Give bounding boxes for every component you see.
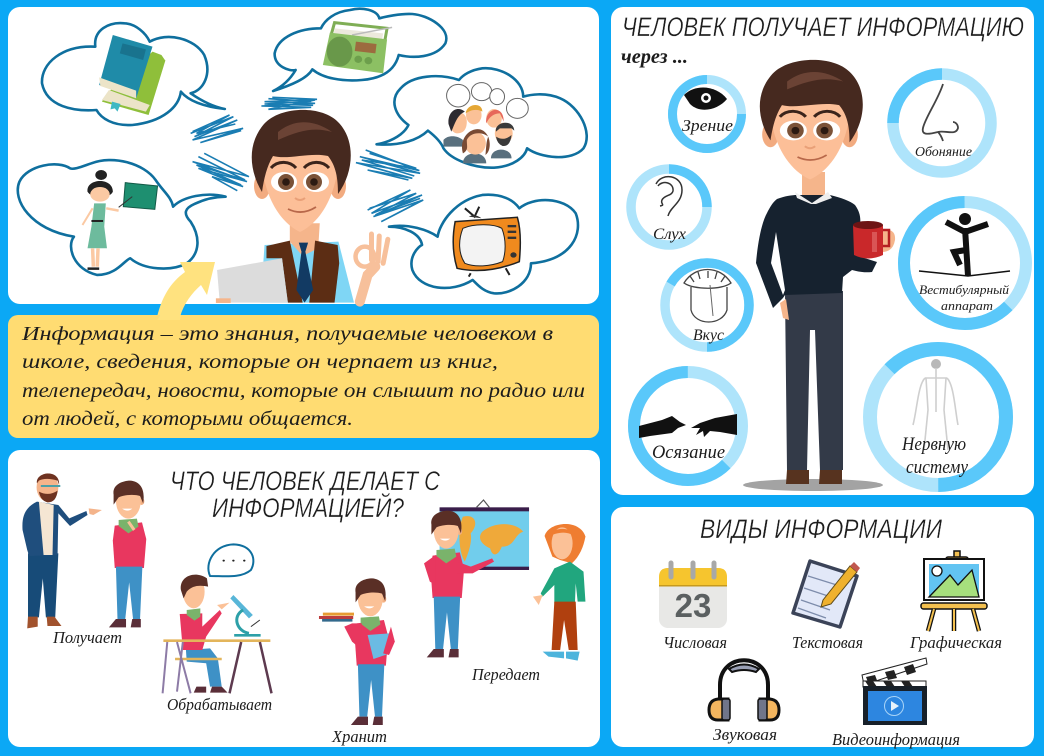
label: Текстовая	[792, 633, 863, 652]
ring: touch: Осязание	[652, 442, 725, 463]
scene: passes on	[424, 500, 585, 661]
scene: processes	[163, 544, 272, 693]
icon: easel with picture	[921, 551, 987, 631]
ring: vision	[672, 80, 742, 148]
icon: calendar	[659, 563, 727, 628]
ring: smell: Обоняние	[915, 145, 972, 160]
ring: taste: Вкус	[693, 327, 724, 344]
definition text: телепередач, новости, которые он слышит по радио или	[22, 380, 585, 402]
icon: red mug	[853, 221, 895, 258]
panel: types of information	[611, 507, 1034, 749]
icon: headphones	[709, 660, 779, 720]
icon: books	[99, 35, 165, 115]
definition text: школе, сведения, которые он черпает из книг,	[22, 351, 498, 373]
character: man with paper and OK gesture	[216, 110, 388, 303]
icon: group of people talking	[443, 83, 528, 163]
ring: nervous system: Нервную	[901, 434, 966, 455]
ring: vestibular apparatus: Вестибулярный	[919, 282, 1010, 297]
label: Графическая	[909, 633, 1002, 652]
ring: nervous system	[870, 349, 1006, 485]
definition text: Информация – это знания, получаемые человеком в	[21, 323, 553, 345]
icon: television	[453, 207, 520, 277]
label: Обрабатывает	[167, 695, 272, 714]
panel: definition of information	[8, 315, 599, 438]
label: Числовая	[663, 633, 727, 652]
heading: ВИДЫ ИНФОРМАЦИИ	[700, 514, 943, 544]
icon: teacher at blackboard	[82, 170, 158, 269]
heading: ЧТО ЧЕЛОВЕК ДЕЛАЕТ С	[170, 466, 440, 496]
speech bubbles and scribbles	[18, 9, 587, 293]
heading: ИНФОРМАЦИЕЙ?	[212, 491, 404, 523]
panel: where information comes from	[8, 7, 599, 317]
heading	[170, 466, 440, 523]
label: Хранит	[331, 727, 387, 746]
definition text: от людей, с которыми общается.	[22, 408, 353, 430]
label: Получает	[52, 628, 122, 647]
ring: vision: Зрение	[682, 116, 733, 135]
label: Звуковая	[713, 725, 777, 744]
scene: stores	[319, 578, 395, 725]
icon: notepad	[793, 561, 860, 627]
ring: nervous system: систему	[906, 457, 969, 478]
ring: taste	[665, 263, 749, 347]
character: man with mug	[743, 60, 883, 491]
subheading: через ...	[621, 46, 688, 68]
icon: radio	[323, 23, 392, 73]
label: Видеоинформация	[832, 730, 960, 749]
ring: vestibular apparatus	[904, 202, 1026, 324]
arrow	[157, 262, 215, 317]
ring: hearing	[631, 169, 707, 245]
scene: receives	[22, 473, 146, 628]
ring: touch	[634, 372, 742, 480]
icon: film clapperboard	[862, 658, 927, 725]
ring: smell	[893, 74, 991, 172]
label: Передает	[471, 665, 540, 684]
definition text	[21, 323, 585, 430]
icon: calendar: 23	[675, 587, 711, 624]
ring: hearing: Слух	[653, 226, 686, 243]
panel: what a person does with information	[8, 450, 600, 747]
ring: vestibular apparatus: аппарат	[941, 298, 993, 313]
panel: how a person receives information	[611, 7, 1034, 495]
